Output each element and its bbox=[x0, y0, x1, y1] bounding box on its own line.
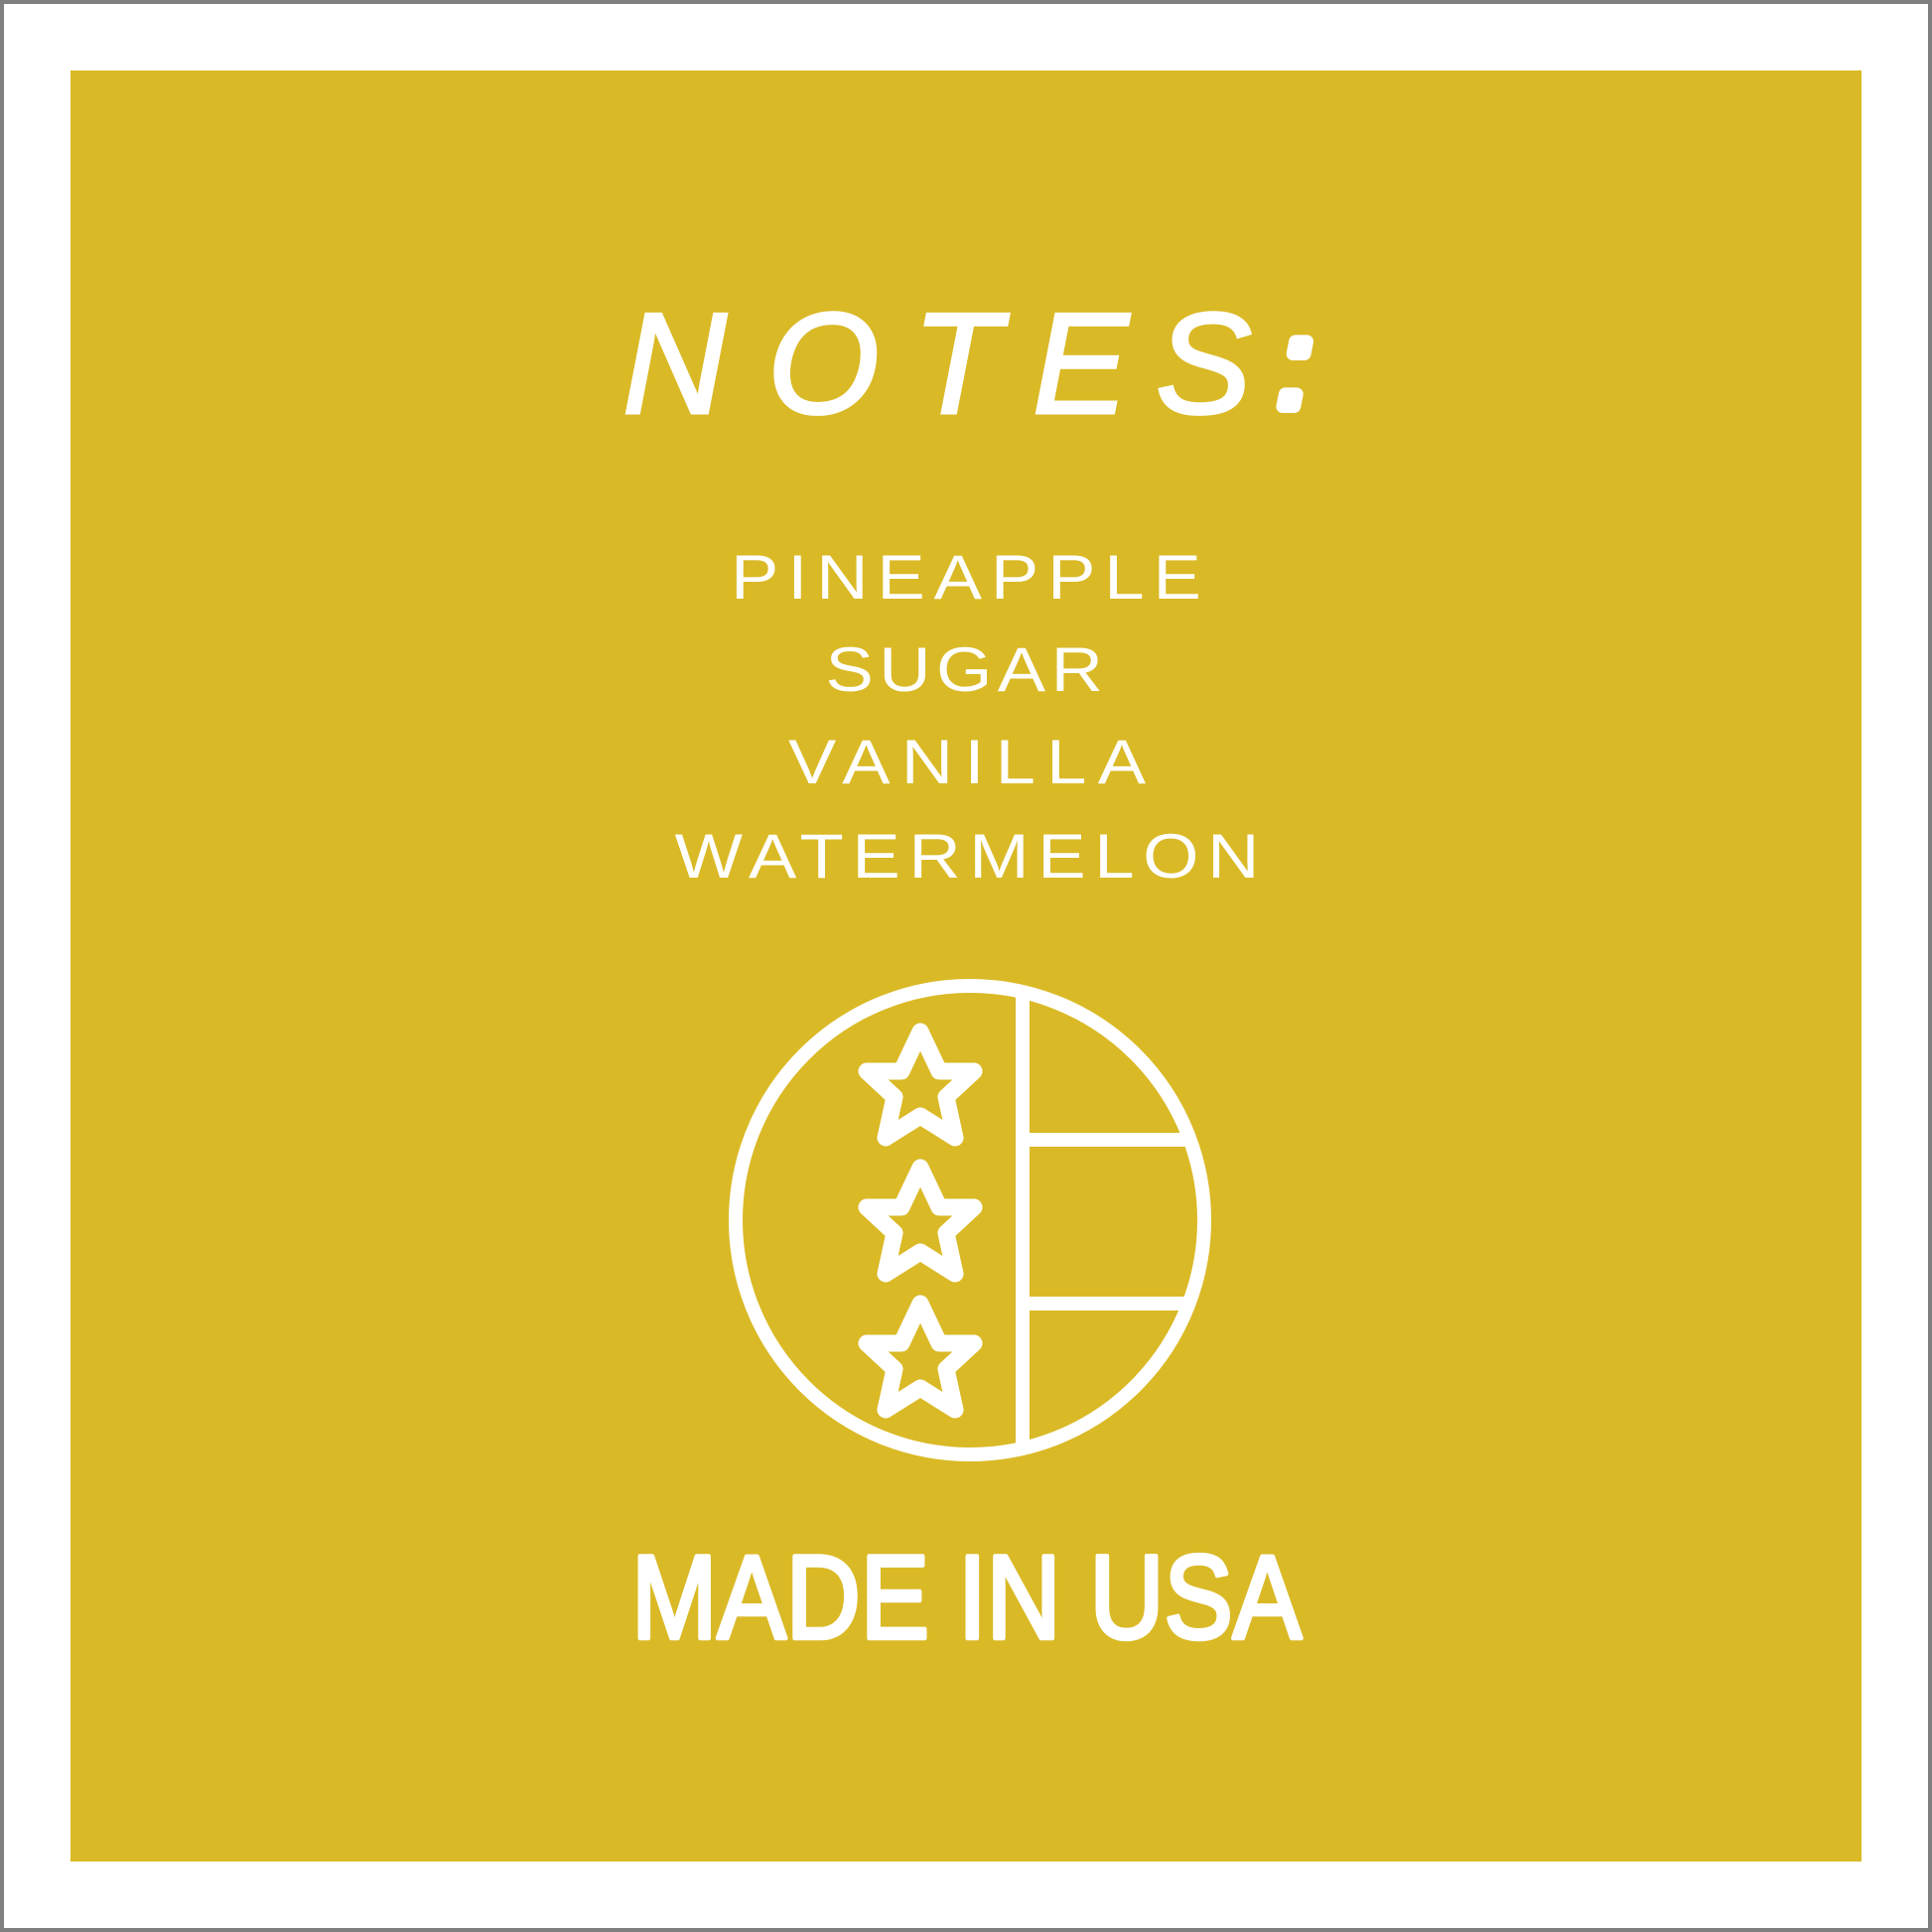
star top bbox=[867, 1032, 974, 1138]
note: sugar: SUGAR bbox=[825, 635, 1103, 705]
star middle bbox=[867, 1168, 974, 1274]
footer label: made in usa: MADE IN USA bbox=[631, 1531, 1302, 1664]
note: vanilla: VANILLA bbox=[788, 728, 1147, 797]
list: flavor notes bbox=[675, 543, 1259, 892]
star bottom bbox=[867, 1304, 974, 1410]
flag stripes bbox=[1023, 993, 1187, 1447]
title: notes: NOTES bbox=[622, 283, 1252, 444]
title: notes: : bbox=[1278, 296, 1311, 433]
note: pineapple: PINEAPPLE bbox=[731, 543, 1201, 613]
icon: american flag globe bbox=[736, 986, 1204, 1454]
note: watermelon: WATERMELON bbox=[675, 822, 1259, 892]
icon ring bbox=[736, 986, 1204, 1454]
